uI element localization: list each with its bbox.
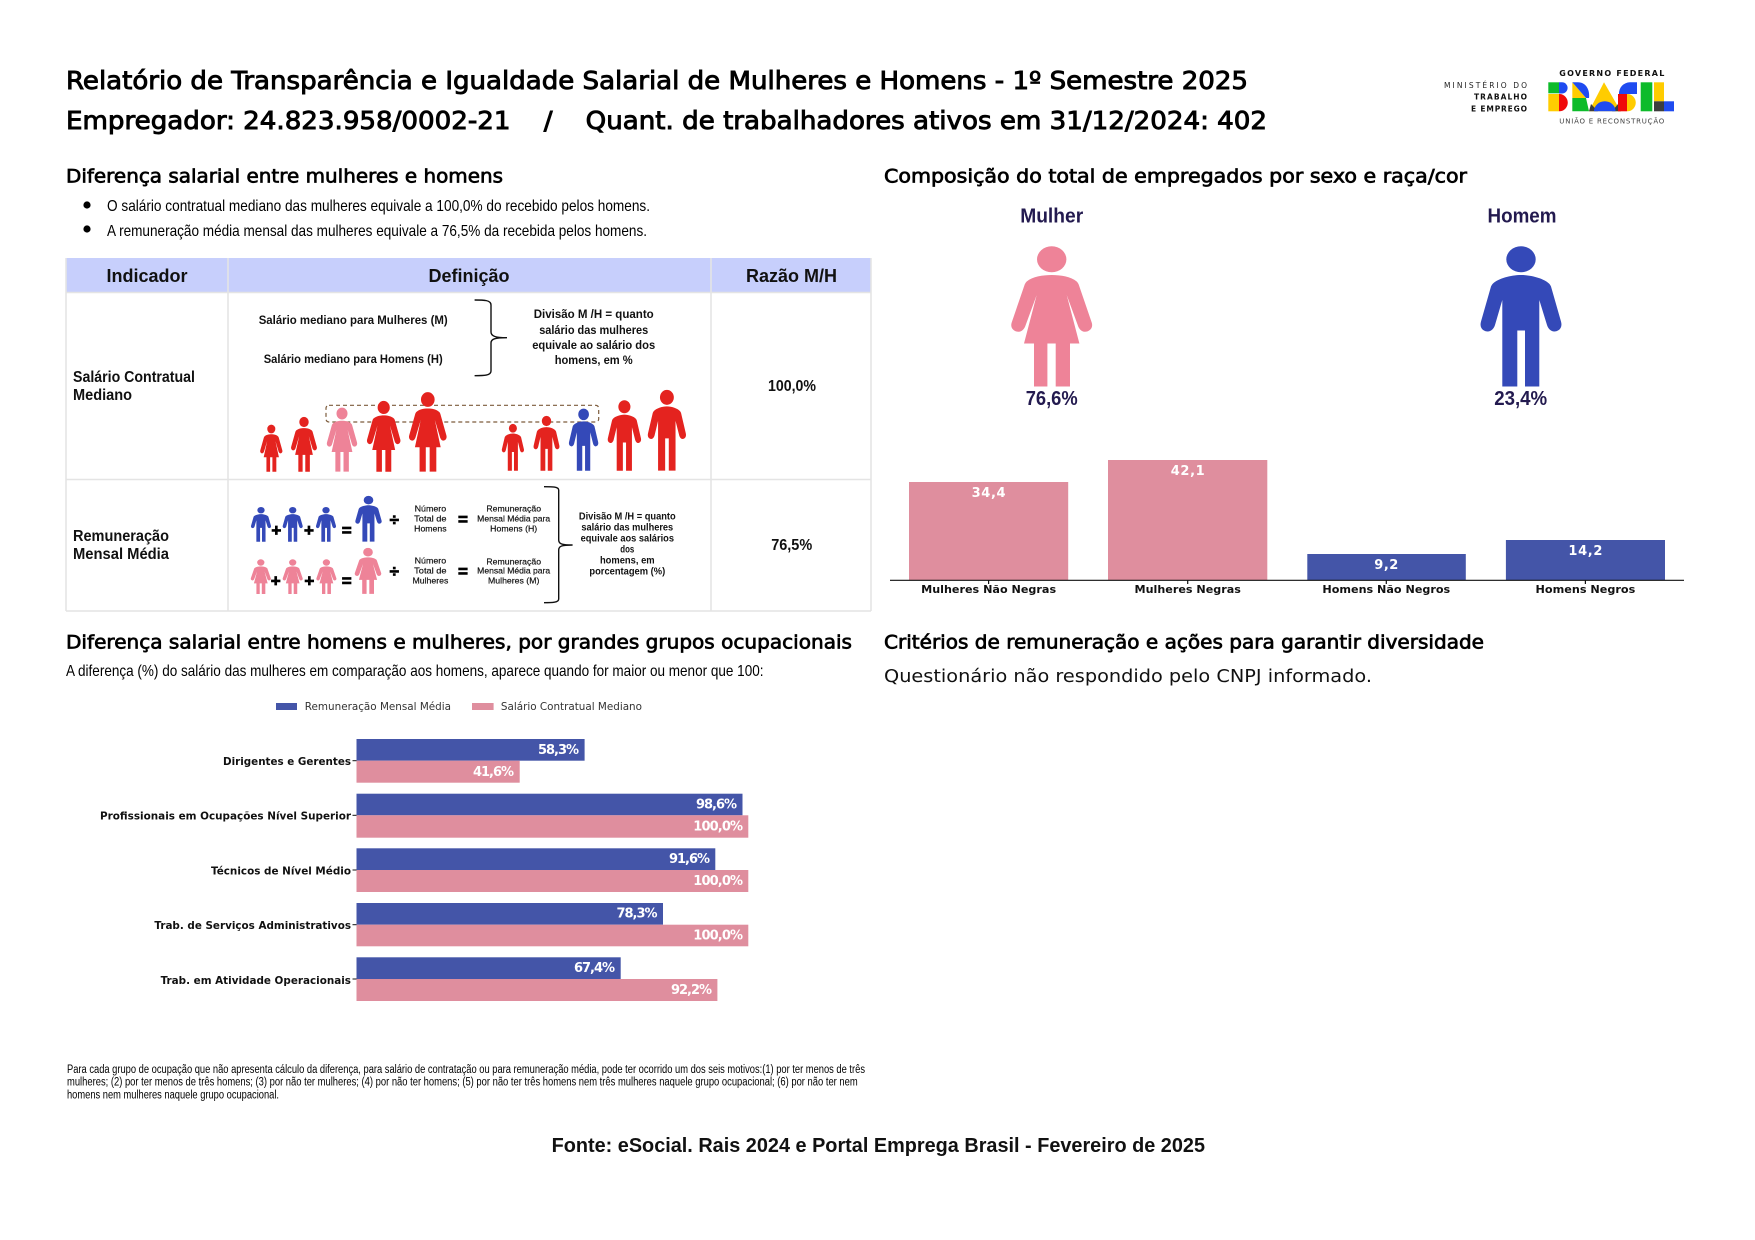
table header bbox=[66, 258, 871, 292]
title: Relatório de Transparência e Igualdade Salarial de Mulheres e Homens - 1º Semestre 2025 bbox=[66, 66, 1248, 95]
group: serviços administrativos: 100,0% bbox=[693, 928, 743, 944]
panel: mulher bbox=[1011, 206, 1092, 410]
group: profissionais nível superior: Profissionais em Ocupações Nível Superior bbox=[100, 811, 352, 823]
panel: tabela de indicadores bbox=[66, 258, 871, 611]
definition: salário mediano: homens, em % bbox=[555, 353, 633, 367]
footnote bbox=[67, 1064, 865, 1102]
group: serviços administrativos: 78,3% bbox=[616, 906, 658, 922]
group: técnicos: 100,0% bbox=[693, 874, 743, 889]
definition: salário mediano: Salário mediano para Homens (H) bbox=[264, 352, 443, 366]
icons: soma de mulheres: + bbox=[271, 572, 281, 590]
bar chart: grupos ocupacionais bbox=[100, 739, 748, 1001]
definition: divisão M/H remuneração: dos bbox=[620, 545, 635, 556]
bar chart: composição por raça/cor: Homens Não Negros bbox=[1322, 583, 1451, 596]
definition: divisão M/H remuneração: homens, em bbox=[600, 556, 655, 567]
text: número total de homens: Homens (H) bbox=[490, 524, 537, 534]
text: número total de mulheres bbox=[412, 556, 550, 586]
definition: salário mediano bbox=[259, 300, 655, 376]
definition: salário mediano: salário das mulheres bbox=[539, 323, 648, 337]
group: técnicos: Técnicos de Nível Médio bbox=[211, 866, 351, 878]
row label: salário contratual mediano bbox=[73, 369, 195, 404]
text: número total de homens bbox=[414, 504, 550, 534]
panel: homem bbox=[1481, 206, 1561, 410]
value: razão remuneração média: 76,5% bbox=[771, 537, 812, 554]
logo: ministério e governo federal: UNIÃO E RECONSTRUÇÃO bbox=[1559, 116, 1665, 126]
definition: salário mediano: Salário mediano para Mulheres (M) bbox=[259, 313, 448, 327]
source line: Fonte: eSocial. Rais 2024 e Portal Emprega Brasil - Fevereiro de 2025 bbox=[552, 1135, 1205, 1157]
icons: soma de mulheres: ÷ bbox=[390, 562, 399, 581]
text: número total de homens: Número bbox=[415, 504, 446, 514]
row label: remuneração mensal média: Mensal Média bbox=[73, 546, 169, 563]
bar chart: composição por raça/cor: 34,4 bbox=[972, 486, 1006, 501]
text: número total de mulheres: Número bbox=[415, 556, 446, 566]
text: número total de mulheres: Total de bbox=[414, 566, 447, 576]
table header: Definição bbox=[428, 266, 510, 286]
heading: composição: Composição do total de empregados por sexo e raça/cor bbox=[884, 166, 1467, 188]
legend: Remuneração Mensal Média bbox=[305, 701, 451, 713]
group: dirigentes e gerentes bbox=[223, 739, 585, 783]
table header: Razão M/H bbox=[746, 266, 837, 286]
panel: mulher: 76,6% bbox=[1026, 388, 1078, 410]
row label: salário contratual mediano: Mediano bbox=[73, 387, 132, 404]
definition: divisão M/H remuneração: salário das mulheres bbox=[581, 523, 674, 534]
definition: divisão M/H remuneração bbox=[544, 487, 676, 603]
text: número total de mulheres: Remuneração bbox=[486, 557, 541, 567]
definition: divisão M/H remuneração: equivale aos salários bbox=[581, 534, 674, 545]
definition: salário mediano: Divisão M /H = quanto bbox=[534, 307, 654, 321]
value: razão salário mediano: 100,0% bbox=[768, 378, 816, 395]
footnote: Para cada grupo de ocupação que não apresenta cálculo da diferença, para salário de contratação ou para remuneração média, pode ter ocorrido um dos seis motivos:(1) por ter menos de três bbox=[67, 1064, 865, 1076]
icons: soma de mulheres: = bbox=[458, 562, 468, 581]
text: subtítulo grupos ocupacionais: A diferença (%) do salário das mulheres em comparação aos homens, aparece quando for maior ou menor que 100: bbox=[66, 663, 764, 680]
bullet list: A remuneração média mensal das mulheres equivale a 76,5% da recebida pelos homens. bbox=[107, 223, 647, 240]
text: número total de mulheres: Mensal Média para bbox=[477, 566, 550, 576]
group: profissionais nível superior: 100,0% bbox=[693, 820, 743, 834]
group: atividade operacionais bbox=[161, 957, 717, 1001]
group: atividade operacionais: 67,4% bbox=[574, 961, 615, 976]
icons: soma de homens: + bbox=[271, 521, 281, 540]
icons: soma de mulheres: + bbox=[304, 572, 314, 590]
text: número total de homens: Total de bbox=[414, 514, 447, 524]
bar chart: composição por raça/cor: Mulheres Não Negras bbox=[921, 583, 1057, 596]
table header: Indicador bbox=[106, 266, 188, 286]
icons: soma de mulheres bbox=[251, 548, 468, 594]
group: dirigentes e gerentes: 58,3% bbox=[538, 743, 579, 758]
icons: soma de homens: + bbox=[304, 521, 314, 540]
bar chart: composição por raça/cor: 14,2 bbox=[1568, 544, 1602, 559]
icons: soma de homens: ÷ bbox=[390, 510, 399, 530]
definition: salário mediano: equivale ao salário dos bbox=[532, 338, 655, 352]
group: técnicos bbox=[211, 848, 748, 892]
legend: Salário Contratual Mediano bbox=[501, 701, 642, 713]
row label: salário contratual mediano: Salário Contratual bbox=[73, 369, 195, 386]
logo: ministério e governo federal: E EMPREGO bbox=[1471, 104, 1527, 114]
logo: ministério e governo federal: TRABALHO bbox=[1474, 92, 1527, 102]
icons: soma de mulheres: = bbox=[342, 572, 352, 590]
group: técnicos: 91,6% bbox=[669, 852, 710, 867]
group: profissionais nível superior: 98,6% bbox=[696, 798, 737, 812]
footnote: mulheres; (2) por ter menos de três homens; (3) por não ter mulheres; (4) por não ter homens; (5) por não ter três homens nem três mulheres naquele grupo ocupacional; (6) por não ter nem bbox=[67, 1076, 858, 1088]
bullet list: O salário contratual mediano das mulheres equivale a 100,0% do recebido pelos homens. bbox=[107, 198, 650, 215]
text: número total de mulheres: Mulheres bbox=[412, 576, 448, 586]
bar chart: composição por raça/cor: 42,1 bbox=[1171, 464, 1205, 479]
icons: soma de homens: = bbox=[458, 510, 468, 529]
footnote: homens nem mulheres naquele grupo ocupacional. bbox=[67, 1090, 279, 1102]
logo: ministério e governo federal bbox=[1444, 69, 1674, 126]
table grid bbox=[66, 258, 871, 611]
bullet list bbox=[83, 198, 650, 240]
panel: mulher: Mulher bbox=[1020, 206, 1083, 228]
bar chart: composição por raça/cor: Homens Negros bbox=[1536, 583, 1636, 596]
group: atividade operacionais: 92,2% bbox=[671, 983, 712, 998]
logo: ministério e governo federal: GOVERNO FEDERAL bbox=[1559, 69, 1664, 78]
row label: remuneração mensal média: Remuneração bbox=[73, 528, 169, 545]
definition: divisão M/H remuneração: Divisão M /H = quanto bbox=[579, 511, 676, 522]
icons: soma de homens bbox=[251, 496, 468, 542]
group: atividade operacionais: Trab. em Atividade Operacionais bbox=[161, 975, 351, 987]
text: questionário não respondido: Questionário não respondido pelo CNPJ informado. bbox=[884, 666, 1372, 687]
panel: homem: Homem bbox=[1488, 206, 1556, 228]
group: dirigentes e gerentes: 41,6% bbox=[473, 765, 514, 780]
text: número total de mulheres: Mulheres (M) bbox=[488, 576, 540, 586]
definition: divisão M/H remuneração: porcentagem (%) bbox=[589, 567, 665, 578]
group: dirigentes e gerentes: Dirigentes e Gerentes bbox=[223, 756, 351, 768]
heading: diferença salarial: Diferença salarial entre mulheres e homens bbox=[66, 166, 503, 188]
bar chart: composição por raça/cor: 9,2 bbox=[1374, 558, 1398, 573]
icons: soma de homens: = bbox=[342, 521, 352, 540]
text: número total de homens: Homens bbox=[414, 524, 447, 534]
heading: critérios: Critérios de remuneração e ações para garantir diversidade bbox=[884, 632, 1484, 654]
panel: homem: 23,4% bbox=[1494, 388, 1547, 410]
group: serviços administrativos bbox=[154, 903, 748, 946]
heading: grupos ocupacionais: Diferença salarial entre homens e mulheres, por grandes grupos ocupacionais bbox=[66, 632, 852, 654]
logo: ministério e governo federal: MINISTÉRIO DO bbox=[1444, 81, 1527, 90]
text: número total de homens: Mensal Média para bbox=[477, 514, 550, 524]
group: profissionais nível superior bbox=[100, 794, 748, 838]
icons: fila de pessoas com mediana destacada bbox=[260, 390, 686, 472]
legend bbox=[276, 701, 642, 713]
title: Empregador: 24.823.958/0002-21 / Quant. de trabalhadores ativos em 31/12/2024: 402 bbox=[66, 106, 1267, 135]
bar chart: composição por raça/cor bbox=[890, 460, 1684, 596]
bar chart: composição por raça/cor: Mulheres Negras bbox=[1134, 583, 1241, 596]
text: número total de homens: Remuneração bbox=[486, 504, 541, 514]
title bbox=[66, 66, 1267, 135]
row label: remuneração mensal média bbox=[73, 528, 169, 563]
group: serviços administrativos: Trab. de Serviços Administrativos bbox=[154, 920, 351, 932]
